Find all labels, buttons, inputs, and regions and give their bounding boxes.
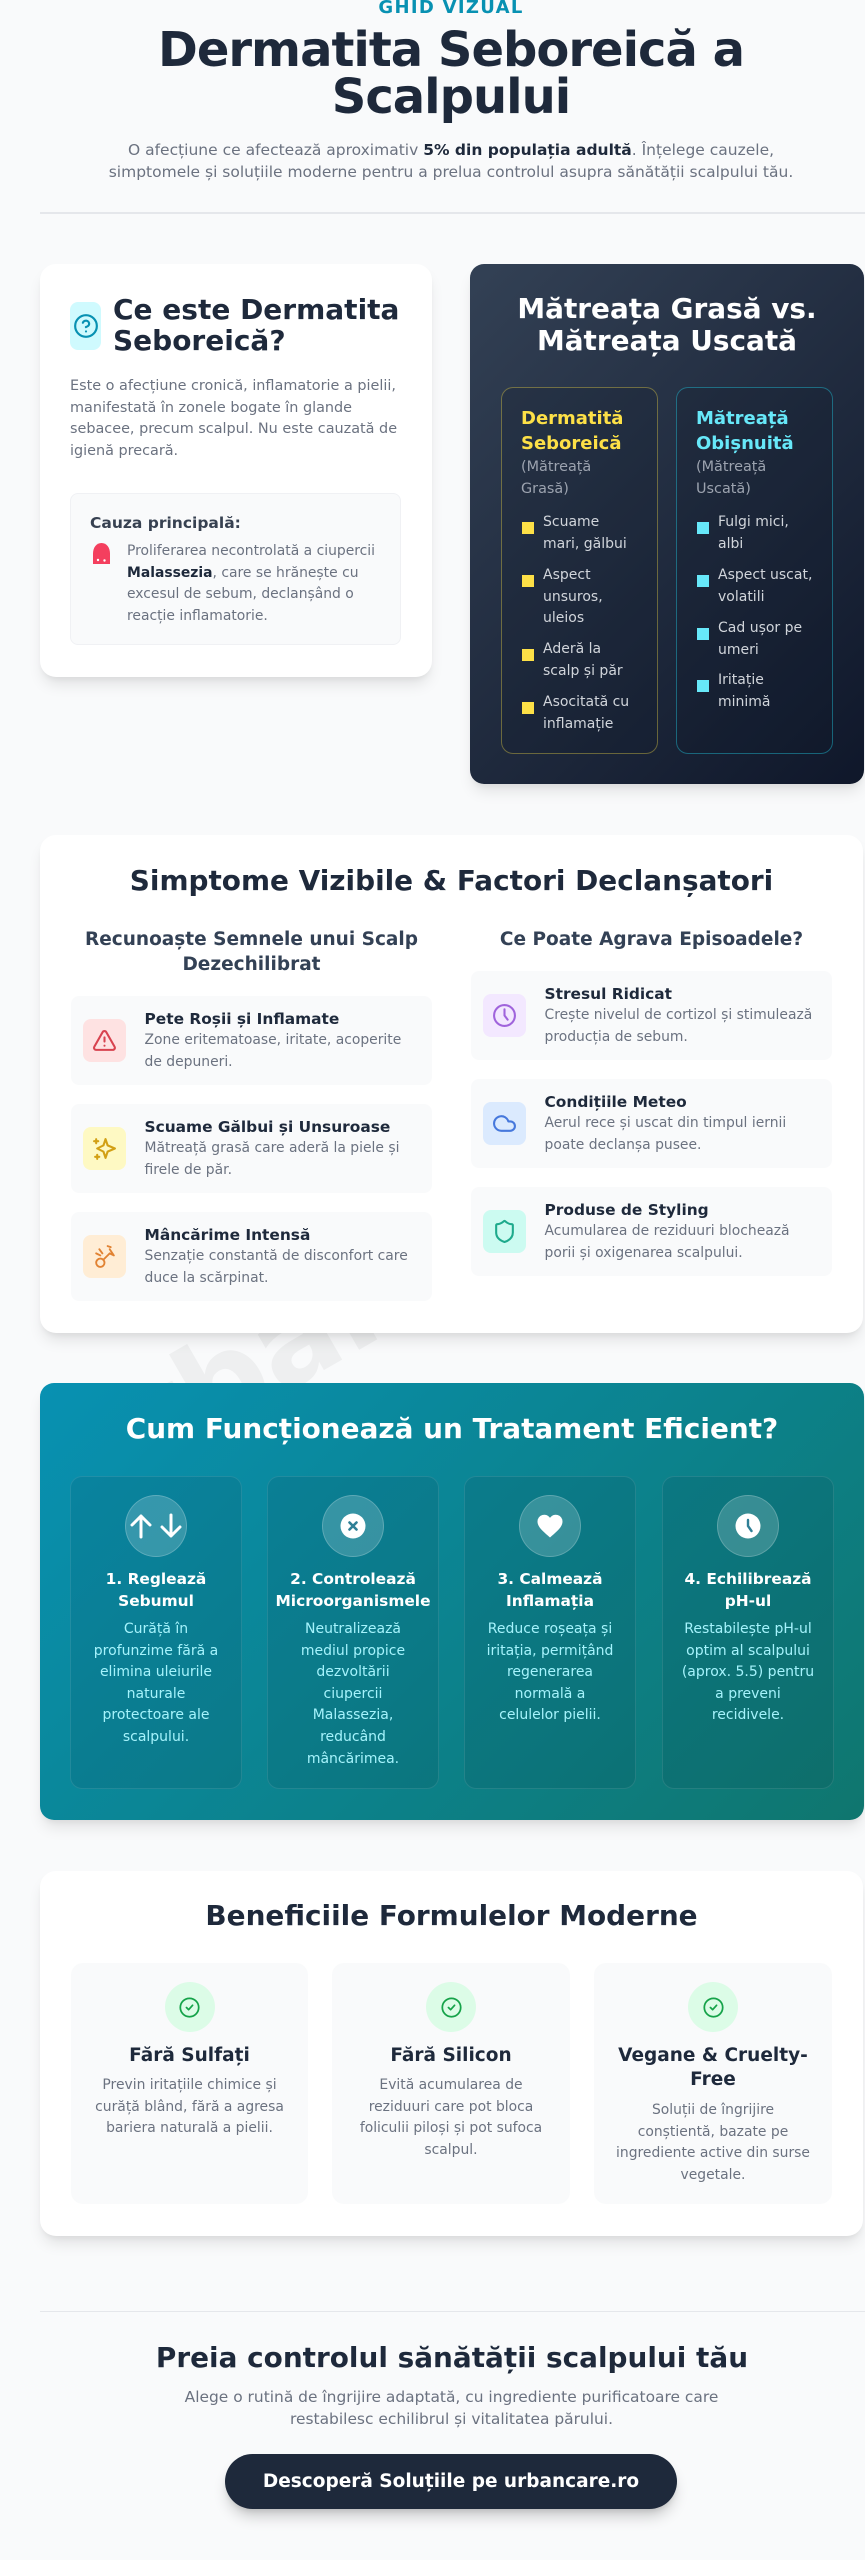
step text: (aprox. 5.5) pentru — [682, 1664, 814, 1680]
benefit text — [360, 2077, 542, 2158]
callout text: Proliferarea necontrolată a ciupercii — [127, 543, 375, 559]
icon: check — [164, 1982, 214, 2032]
column heading: Obișnuită — [696, 433, 794, 454]
icon: heart — [519, 1495, 581, 1557]
subtitle: simptomele și soluțiile moderne pentru a prelua controlul asupra sănătății scalpului tău. — [109, 163, 793, 181]
benefit text: bariera naturală a pielii. — [106, 2120, 273, 2136]
icon: arrows up down — [125, 1495, 187, 1557]
column: regular dandruff: minimă — [718, 694, 771, 710]
column: seborrheic dermatitis — [501, 387, 658, 754]
column: seborrheic dermatitis: Asocitată cu — [543, 694, 629, 710]
list item — [522, 514, 627, 552]
symptom: yellow scales: firele de păr. — [144, 1162, 232, 1178]
step text: dezvoltării — [316, 1664, 390, 1680]
benefit text: Soluții de îngrijire — [652, 2102, 774, 2118]
heading: Ce este Dermatita — [113, 293, 399, 326]
panel: symptoms and triggers — [40, 835, 863, 1333]
button: Descoperă Soluțiile pe urbancare.ro — [263, 2471, 639, 2492]
trigger: weather: poate declanșa pusee. — [544, 1137, 701, 1153]
step text: mediul propice — [301, 1643, 405, 1659]
step title: 1. Reglează — [106, 1570, 206, 1588]
column subtitle: Grasă) — [521, 481, 569, 497]
step title — [106, 1570, 206, 1610]
benefit text: foliculii piloși și pot sufoca — [360, 2120, 542, 2136]
title: Dermatita Seboreică a — [158, 22, 744, 78]
list item — [697, 672, 771, 710]
icon: circle x — [322, 1495, 384, 1557]
icon: check — [688, 1982, 738, 2032]
heading — [517, 292, 817, 357]
callout text — [127, 543, 375, 624]
step title: 3. Calmează — [497, 1570, 603, 1588]
icon: sparkles — [83, 1127, 126, 1170]
footer text: Alege o rutină de îngrijire adaptată, cu ingrediente purificatoare care — [185, 2388, 718, 2406]
trigger: styling products — [471, 1187, 832, 1276]
step text: celulelor pielii. — [499, 1707, 601, 1723]
trigger text: Produse de Styling — [544, 1201, 709, 1219]
column: regular dandruff: Aspect uscat, — [718, 567, 812, 583]
step text — [94, 1621, 218, 1745]
step 3 — [464, 1476, 636, 1789]
symptom: red patches: de depuneri. — [144, 1054, 233, 1070]
callout text: Malassezia, care se hrănește cu — [127, 565, 359, 581]
list item — [522, 694, 629, 732]
trigger: styling products: Acumularea de reziduuri blochează — [544, 1223, 790, 1239]
step text: scalpului. — [123, 1729, 189, 1745]
column subtitle — [521, 459, 591, 497]
list item — [697, 567, 812, 605]
step 1 — [70, 1476, 242, 1789]
symptom: yellow scales — [71, 1104, 432, 1193]
benefit text: vegetale. — [681, 2167, 745, 2183]
benefit: vegan and cruelty free — [594, 1963, 832, 2204]
icon: check — [426, 1982, 476, 2032]
step text: reducând — [320, 1729, 386, 1745]
description: manifestată în zonele bogate în glande — [70, 400, 352, 416]
column: regular dandruff: Cad ușor pe — [718, 620, 802, 636]
column heading: Seboreică — [521, 433, 622, 454]
step text — [301, 1621, 405, 1767]
step text: iritația, permițând — [487, 1643, 613, 1659]
symptom text: Mâncărime Intensă — [144, 1226, 310, 1244]
footer title: Preia controlul sănătății scalpului tău — [156, 2341, 748, 2374]
callout text: reacție inflamatorie. — [127, 608, 268, 624]
step title — [684, 1570, 812, 1610]
column subtitle: Uscată) — [696, 481, 751, 497]
step title: Sebumul — [118, 1592, 194, 1610]
step text: protectoare ale — [103, 1707, 209, 1723]
step text: Malassezia, — [313, 1707, 393, 1723]
benefit title — [618, 2044, 808, 2090]
step title: 2. Controlează — [290, 1570, 416, 1588]
step text: ciupercii — [324, 1686, 382, 1702]
step text — [682, 1621, 814, 1723]
step 2 — [267, 1476, 439, 1789]
step text: Neutralizează — [305, 1621, 401, 1637]
subheading: symptoms: Dezechilibrat — [182, 954, 321, 975]
heading: Mătreața Grasă vs. — [517, 292, 817, 325]
step title: 4. Echilibrează — [684, 1570, 812, 1588]
heading: Cum Funcționează un Tratament Eficient? — [126, 1412, 778, 1445]
step 4 — [662, 1476, 834, 1789]
column: seborrheic dermatitis: Aspect — [543, 567, 591, 583]
footer text — [184, 2388, 718, 2428]
subheading: symptoms: Recunoaște Semnele unui Scalp — [85, 929, 418, 950]
column: regular dandruff: albi — [718, 536, 743, 552]
trigger text: Condițiile Meteo — [544, 1093, 687, 1111]
step text: Reduce roșeața și — [488, 1621, 612, 1637]
step text: Curăță în — [124, 1621, 188, 1637]
step text — [487, 1621, 613, 1723]
column: seborrheic dermatitis: inflamație — [543, 716, 613, 732]
benefit title: Vegane & Cruelty- — [618, 2044, 808, 2066]
button — [225, 2454, 677, 2509]
list item — [697, 514, 789, 552]
step text: profunzime fără a — [94, 1643, 218, 1659]
benefit text: scalpul. — [424, 2142, 478, 2158]
title — [158, 22, 744, 124]
subheading: symptoms — [85, 929, 418, 975]
icon: warning — [83, 1019, 126, 1062]
watermark: urbancare.ro — [26, 977, 855, 1536]
step title: Microorganismele — [275, 1592, 431, 1610]
step title — [275, 1570, 431, 1610]
step text: elimina uleiurile — [100, 1664, 212, 1680]
benefit text: conștientă, bazate pe — [638, 2124, 788, 2140]
column subtitle — [696, 459, 766, 497]
callout: main cause — [70, 493, 401, 645]
heading: Mătreața Uscată — [537, 324, 797, 357]
column: seborrheic dermatitis: unsuros, — [543, 589, 603, 605]
benefit text: Previn iritațiile chimice și — [102, 2077, 277, 2093]
icon: fungus — [93, 543, 110, 564]
benefit text: curăță blând, fără a agresa — [95, 2099, 284, 2115]
column: seborrheic dermatitis: mari, gălbui — [543, 536, 627, 552]
trigger: styling products: porii și oxigenarea scalpului. — [544, 1245, 743, 1261]
symptom: itching: duce la scărpinat. — [144, 1270, 268, 1286]
icon: cloud — [483, 1102, 526, 1145]
benefit: no silicone — [332, 1963, 570, 2204]
symptom text: Pete Roșii și Inflamate — [144, 1010, 339, 1028]
icon: itch — [83, 1235, 126, 1278]
column: regular dandruff — [676, 387, 833, 754]
trigger: stress: producția de sebum. — [544, 1029, 688, 1045]
column: seborrheic dermatitis: scalp și păr — [543, 663, 623, 679]
column heading: Mătreață — [696, 408, 789, 429]
symptom: red patches — [71, 996, 432, 1085]
column: seborrheic dermatitis: Scuame — [543, 514, 599, 530]
list item — [522, 641, 623, 679]
column: seborrheic dermatitis: Aderă la — [543, 641, 601, 657]
description: igienă precară. — [70, 443, 178, 459]
trigger: stress: Crește nivelul de cortizol și stimulează — [544, 1007, 812, 1023]
symptom: itching: Senzație constantă de disconfort care — [144, 1248, 408, 1264]
callout text: excesul de sebum, declanșând o — [127, 586, 354, 602]
panel: how treatment works — [40, 1383, 864, 1820]
symptom: yellow scales: Mătreață grasă care aderă la piele și — [144, 1140, 399, 1156]
footer call to action — [156, 2341, 748, 2523]
benefit: no sulfates — [71, 1963, 308, 2204]
symptom: itching — [71, 1212, 432, 1301]
benefit title: Fără Sulfați — [129, 2044, 250, 2066]
step title: pH-ul — [725, 1592, 771, 1610]
column: regular dandruff: Fulgi mici, — [718, 514, 789, 530]
icon: shield — [483, 1210, 526, 1253]
benefit text — [95, 2077, 284, 2136]
panel: oily vs dry dandruff — [470, 264, 864, 784]
column: seborrheic dermatitis: uleios — [543, 610, 584, 626]
footer text: restabilesc echilibrul și vitalitatea părului. — [290, 2410, 613, 2428]
column heading: Dermatită — [521, 408, 623, 429]
step text: optim al scalpului — [686, 1643, 810, 1659]
column: regular dandruff: volatili — [718, 589, 764, 605]
list item — [522, 567, 603, 626]
icon: clock — [483, 994, 526, 1037]
list item — [697, 620, 802, 658]
step title: Inflamația — [506, 1592, 594, 1610]
trigger: weather — [471, 1079, 832, 1168]
heading: Seboreică? — [113, 324, 286, 356]
step text: Restabilește pH-ul — [684, 1621, 812, 1637]
heading — [113, 293, 399, 356]
column heading — [521, 408, 623, 454]
description — [70, 378, 397, 459]
symptom: red patches: Zone eritematoase, iritate, acoperite — [144, 1032, 401, 1048]
callout heading: Cauza principală: — [90, 514, 241, 532]
step title — [497, 1570, 603, 1610]
icon: clock — [717, 1495, 779, 1557]
step text: naturale — [127, 1686, 185, 1702]
subtitle: O afecțiune ce afectează aproximativ 5% din populația adultă. Înțelege cauzele, — [128, 141, 774, 159]
benefit text: Evită acumularea de — [379, 2077, 523, 2093]
benefit title: Free — [690, 2069, 736, 2090]
title: Scalpului — [332, 68, 570, 124]
step text: a preveni — [715, 1686, 781, 1702]
subtitle — [109, 141, 793, 181]
heading: Beneficiile Formulelor Moderne — [205, 1899, 698, 1932]
benefit text: reziduuri care pot bloca — [369, 2099, 533, 2115]
step text: recidivele. — [712, 1707, 784, 1723]
benefit text: ingrediente active din surse — [616, 2145, 810, 2161]
trigger text: Stresul Ridicat — [544, 985, 672, 1003]
symptom text: Scuame Gălbui și Unsuroase — [144, 1118, 390, 1136]
benefit title: Fără Silicon — [390, 2044, 512, 2066]
description: sebacee, precum scalpul. Nu este cauzată de — [70, 421, 397, 437]
benefit text — [616, 2102, 810, 2183]
trigger: stress — [471, 971, 832, 1060]
column subtitle: (Mătreață — [696, 459, 766, 475]
icon: question mark — [70, 302, 101, 350]
panel: benefits — [40, 1871, 863, 2236]
column: regular dandruff: umeri — [718, 642, 759, 658]
subheading: triggers: Ce Poate Agrava Episoadele? — [500, 929, 803, 950]
panel: what is seborrheic dermatitis — [40, 264, 432, 677]
trigger: weather: Aerul rece și uscat din timpul iernii — [544, 1115, 786, 1131]
step text: mâncărimea. — [307, 1751, 399, 1767]
column subtitle: (Mătreață — [521, 459, 591, 475]
heading: Simptome Vizibile & Factori Declanșatori — [130, 864, 773, 897]
description: Este o afecțiune cronică, inflamatorie a pielii, — [70, 378, 396, 394]
header — [109, 0, 793, 181]
step text: normală a — [515, 1686, 585, 1702]
step text: regenerarea — [507, 1664, 593, 1680]
column: regular dandruff: Iritație — [718, 672, 764, 688]
column heading — [696, 408, 794, 454]
